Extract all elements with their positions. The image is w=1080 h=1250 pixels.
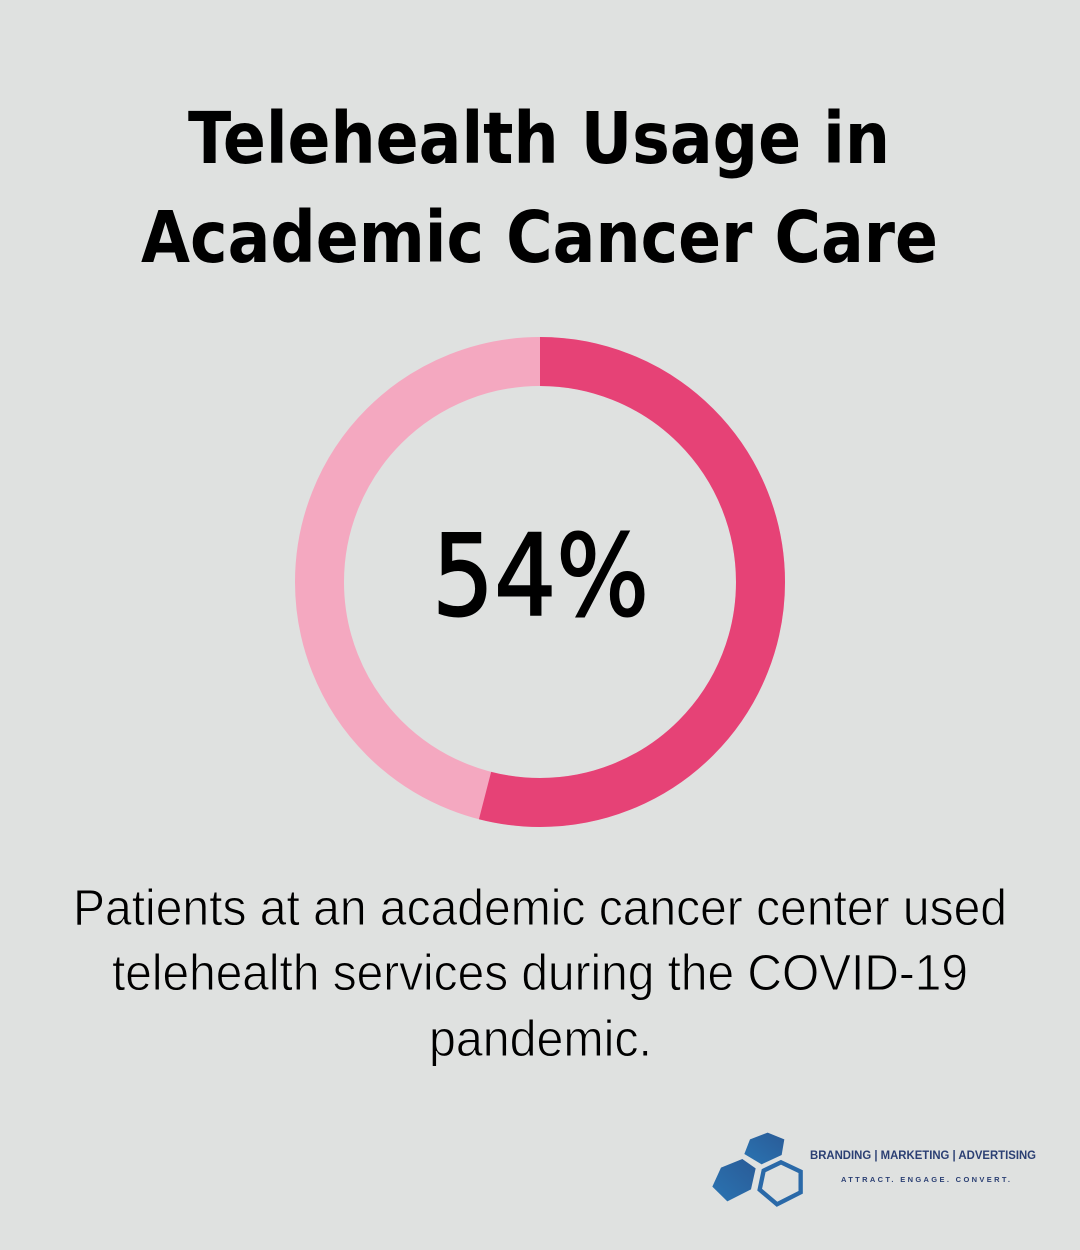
donut chart xyxy=(320,362,760,802)
icon: hexagons xyxy=(712,1133,801,1204)
title xyxy=(141,97,938,279)
title: Telehealth Usage in xyxy=(188,97,890,180)
description: Patients at an academic cancer center used xyxy=(73,879,1007,936)
logo xyxy=(712,1133,1036,1204)
title: Academic Cancer Care xyxy=(141,196,938,279)
description: telehealth services during the COVID-19 xyxy=(112,944,968,1001)
donut value: 54% xyxy=(432,512,649,642)
logo slogan: ATTRACT. ENGAGE. CONVERT. xyxy=(841,1175,1010,1184)
description: pandemic. xyxy=(429,1010,652,1067)
logo tagline: BRANDING | MARKETING | ADVERTISING xyxy=(810,1150,1036,1162)
description xyxy=(73,879,1007,1067)
